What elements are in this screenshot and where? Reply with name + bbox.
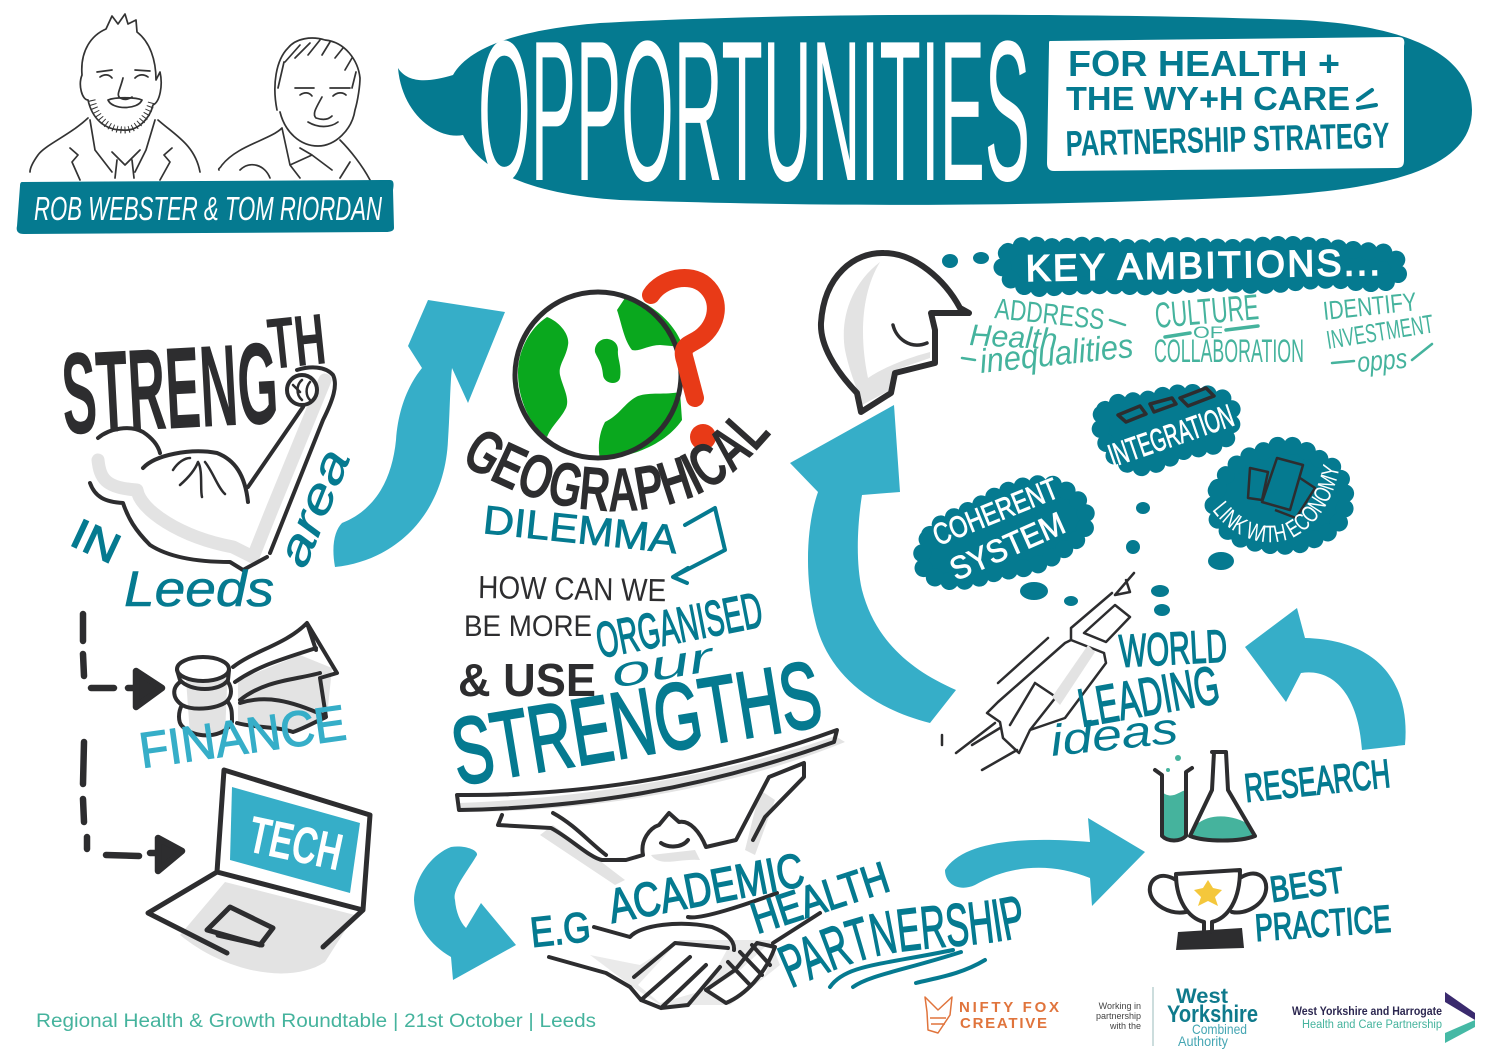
label: RESEARCH: RESEARCH (1242, 752, 1392, 811)
label: COHERENT: COHERENT (928, 472, 1063, 552)
line: investment: INVESTMENT (1324, 308, 1436, 355)
label: HEALTH: HEALTH (745, 853, 895, 944)
name text: ROB WEBSTER & TOM RIORDAN (34, 190, 382, 227)
cloud: key ambitions (1002, 245, 1399, 288)
logo: Nifty Fox Creative: NIFTY FOX (959, 999, 1059, 1016)
line: inequalities: inequalities (978, 327, 1135, 381)
label: IN: IN (64, 510, 128, 572)
logo: Nifty Fox Creative (925, 997, 1059, 1033)
portrait: Rob Webster (30, 14, 200, 180)
label: BEST: BEST (1267, 859, 1346, 910)
label: PRACTICE: PRACTICE (1254, 899, 1392, 950)
label: LEADING: LEADING (1074, 655, 1224, 739)
subtitle box (1047, 37, 1404, 171)
logo: West Yorkshire Combined Authority: partnership (1096, 1011, 1141, 1021)
arrow: partnership to research (945, 818, 1145, 906)
accent ticks (1358, 90, 1376, 108)
heading: STRENGTHS: STRENGTHS (444, 641, 828, 805)
ambition: culture of collaboration (1153, 286, 1304, 369)
logo: West Yorkshire and Harrogate Health and Care Partnership: Health and Care Partnership (1302, 1019, 1442, 1031)
cloud: link with economy (1204, 436, 1354, 555)
portraits: speakers (30, 14, 370, 180)
text: be more: BE MORE (464, 610, 592, 643)
label: INTEGRATION: INTEGRATION (1104, 397, 1238, 474)
icon: chain (1118, 388, 1214, 422)
section: strength in Leeds (59, 299, 360, 617)
section: geographical dilemma (444, 418, 828, 805)
label: PARTNERSHIP: PARTNERSHIP (776, 896, 1022, 988)
portrait: Tom Riordan (219, 38, 370, 180)
label: Leeds: Leeds (124, 561, 274, 617)
text: organised: ORGANISED (591, 582, 767, 669)
icon: coins and notes (174, 623, 337, 735)
heading: DILEMMA: DILEMMA (481, 498, 680, 562)
ambition: address health inequalities (962, 293, 1135, 381)
icon: handshake (549, 893, 820, 1008)
logo: West Yorkshire and Harrogate Health and Care Partnership (1292, 992, 1475, 1043)
ambition: identify investment opps (1321, 286, 1436, 378)
title speech banner (398, 0, 1472, 223)
line: health: Health (969, 319, 1058, 357)
arrow: Leeds to globe (333, 300, 505, 567)
section: strength in Leeds: STRENG (59, 318, 281, 459)
icon: globe with question mark (515, 278, 716, 459)
label: ACADEMIC: ACADEMIC (604, 844, 808, 934)
logo: West Yorkshire Combined Authority: Combined (1192, 1021, 1247, 1037)
logo: West Yorkshire Combined Authority: West (1176, 985, 1228, 1008)
line: of: OF (1193, 323, 1223, 342)
thought dots (942, 252, 1234, 616)
logo: West Yorkshire and Harrogate Health and Care Partnership: West Yorkshire and Harrogate (1292, 1006, 1442, 1018)
label: E.G: E.G (528, 903, 593, 956)
line: opps: opps (1356, 343, 1408, 378)
icon: thinking head (821, 253, 969, 412)
icon: person balancing strengths (457, 730, 845, 885)
icon: flexed arm (90, 367, 335, 570)
arrow: dilemma to question (673, 508, 725, 583)
label: WORLD LEADING ideas (1048, 619, 1228, 766)
icon: rocket (942, 573, 1134, 770)
label: SYSTEM: SYSTEM (944, 505, 1070, 587)
dashed connector to finance (83, 614, 162, 707)
footer text: Regional Health & Growth Roundtable | 21st October | Leeds (36, 1011, 596, 1032)
label: WORLD: WORLD (1118, 619, 1228, 677)
section: academic health partnership (528, 844, 1022, 1010)
cloud: coherent system (922, 472, 1087, 587)
heading: KEY AMBITIONS: KEY AMBITIONS... (1025, 242, 1380, 289)
icon: banknotes (1248, 458, 1315, 518)
decorative waves (830, 950, 985, 987)
logo: West Yorkshire Combined Authority: with the (1109, 1021, 1141, 1031)
name banner (17, 180, 394, 234)
section: best practice (1150, 859, 1392, 950)
logo: West Yorkshire Combined Authority: Authority (1178, 1033, 1228, 1049)
text: how can we: HOW CAN WE (478, 569, 666, 608)
label: ideas: ideas (1048, 704, 1180, 766)
logo: West Yorkshire Combined Authority (1096, 985, 1258, 1049)
logo: West Yorkshire Combined Authority: Working in (1099, 1001, 1141, 1011)
line: culture: CULTURE (1153, 286, 1260, 336)
line: identify: IDENTIFY (1321, 286, 1418, 326)
label: LINK WITH ECONOMY: LINK WITH ECONOMY (1212, 464, 1339, 542)
line: collaboration: COLLABORATION (1154, 333, 1304, 369)
dashed connector to tech (83, 742, 182, 871)
label: FINANCE: FINANCE (136, 694, 350, 779)
heading: GEOGRAPHICAL: GEOGRAPHICAL (467, 418, 772, 512)
arrow: rocket up to head (790, 405, 956, 723)
icon: trophy (1150, 870, 1266, 950)
logo: West Yorkshire Combined Authority: Yorkshire (1167, 1001, 1258, 1028)
icon: laptop (148, 770, 370, 973)
arrow: research up to world leading (1245, 608, 1406, 750)
heading: TH: TH (264, 299, 329, 385)
section: research (1155, 752, 1392, 840)
icon: flasks (1155, 752, 1255, 840)
cloud: integration (1100, 388, 1238, 474)
subtitle line 1: FOR HEALTH + (1068, 43, 1340, 84)
arrow: down to partnership (414, 847, 516, 980)
text: our: our (607, 632, 719, 697)
label: TECH: TECH (244, 806, 348, 882)
subtitle line 2: THE WY+H CARE (1066, 80, 1350, 117)
text: and use: & USE (458, 654, 596, 706)
line: address: ADDRESS (993, 293, 1106, 336)
logo: Nifty Fox Creative: CREATIVE (960, 1015, 1047, 1032)
label: area: area (266, 441, 360, 574)
section: key ambitions (962, 242, 1436, 381)
